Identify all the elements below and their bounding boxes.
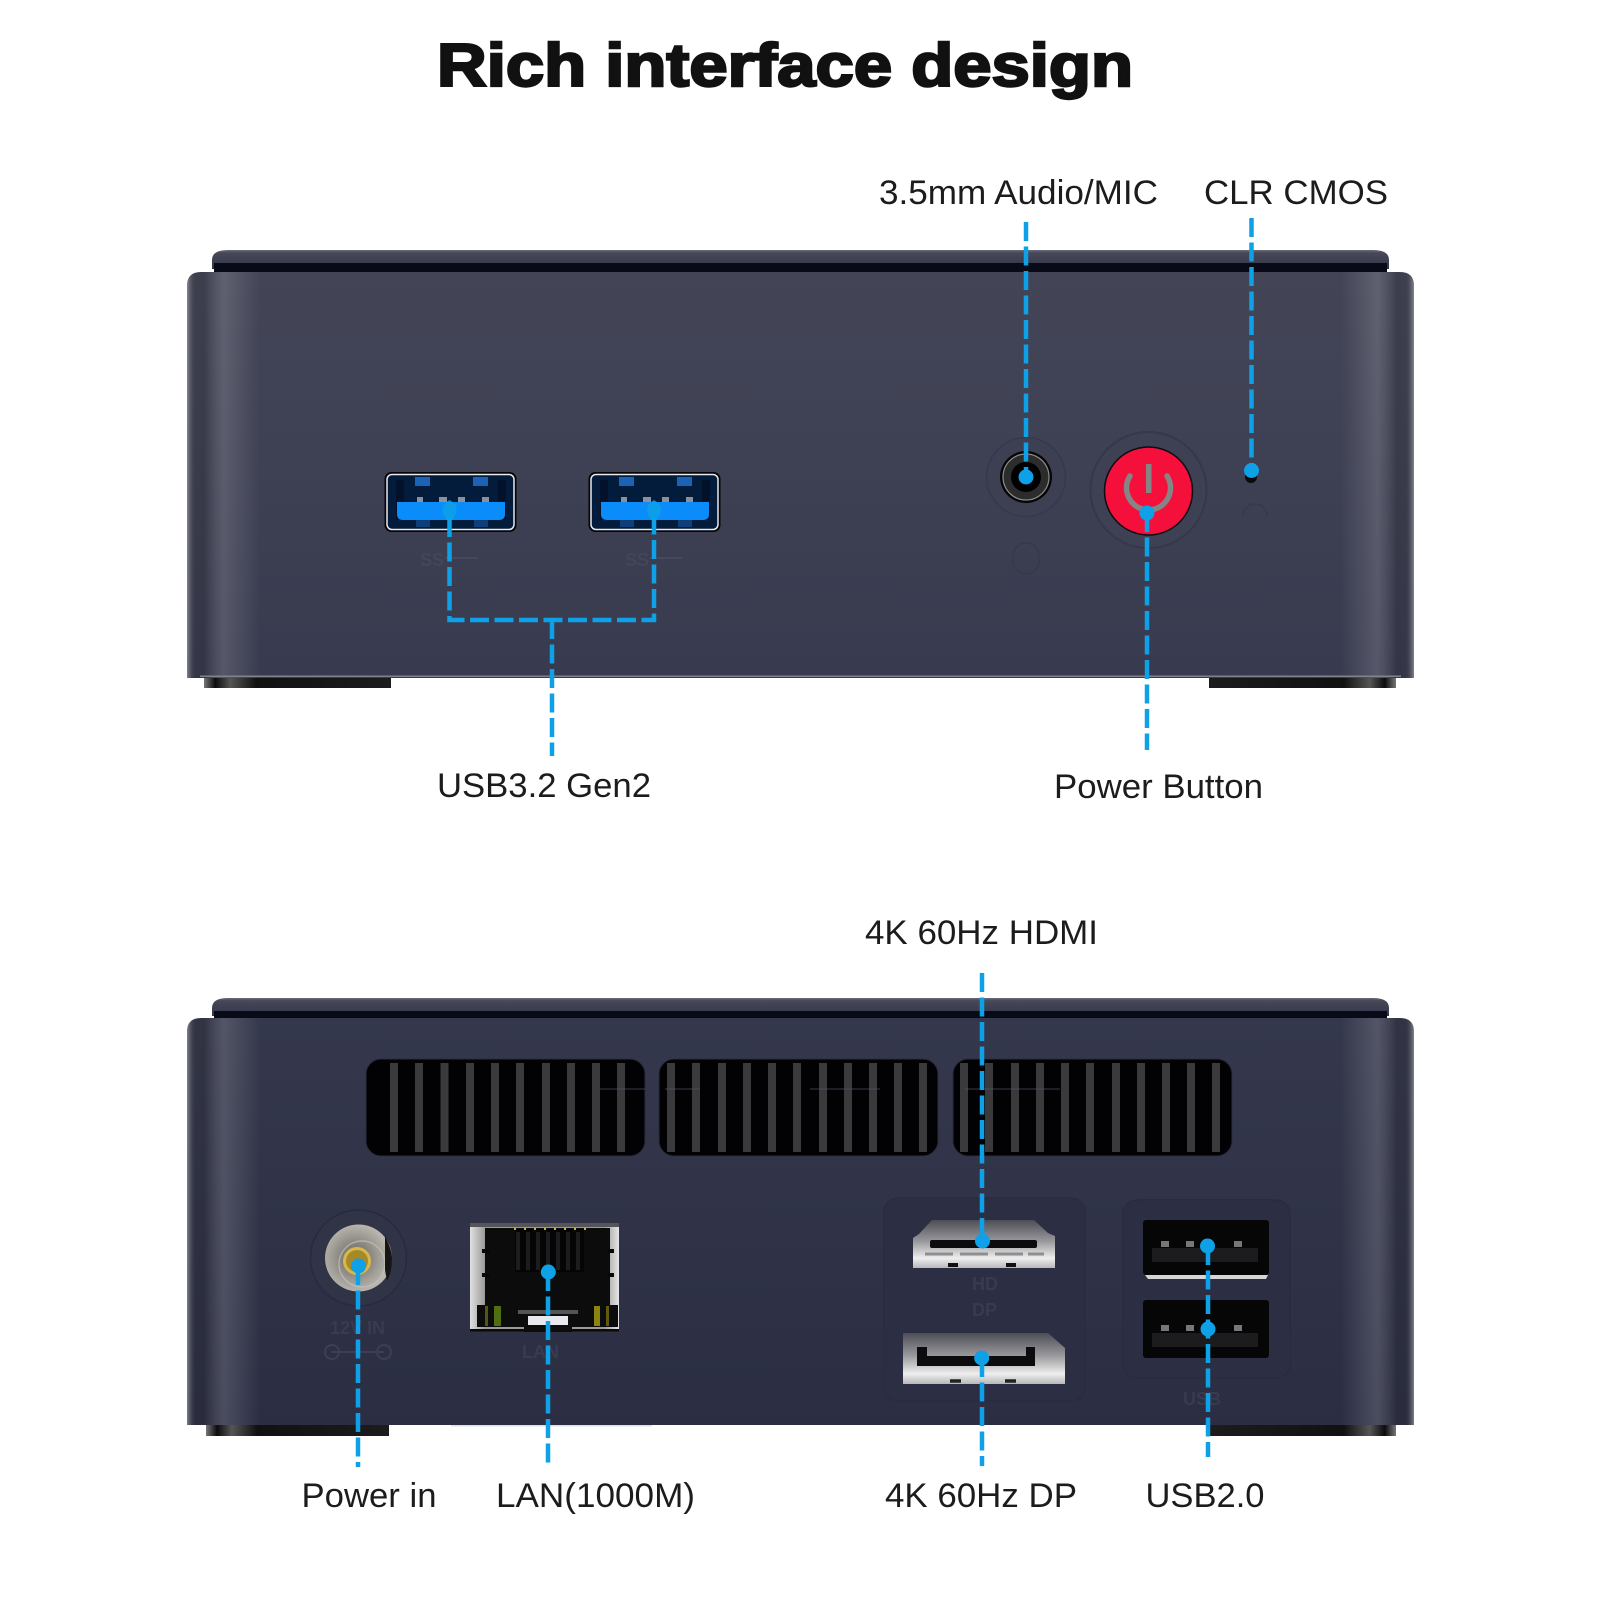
video panel HDMI and DP: DP (972, 1300, 997, 1320)
callout line: HDMI (975, 973, 990, 1248)
title: Rich interface design (437, 32, 1133, 99)
label: 4K 60Hz DP: 4K 60Hz DP (885, 1477, 1077, 1515)
USB logos (420, 550, 682, 570)
callout line: Power in (351, 1258, 366, 1467)
callout line: USB2.0 (1200, 1238, 1216, 1457)
audio jack (986, 438, 1066, 574)
label: Power Button: Power Button (1054, 768, 1263, 806)
vents (366, 1059, 1232, 1156)
USB3 port left (384, 472, 516, 532)
label: USB3.2 Gen2: USB3.2 Gen2 (437, 767, 651, 805)
USB2 port bottom (1143, 1300, 1269, 1358)
label: 4K 60Hz HDMI: 4K 60Hz HDMI (865, 914, 1098, 952)
power button (1090, 432, 1206, 548)
device body (187, 272, 1414, 678)
LAN port: LAN (522, 1342, 559, 1362)
callout line: LAN (541, 1264, 556, 1464)
video panel HDMI and DP (884, 1198, 1085, 1401)
callout line: 3.5mm Audio/MIC (1018, 222, 1034, 484)
panel: rear of mini PC (187, 998, 1414, 1436)
callout lines and dots: USB3.2 Gen2 (442, 500, 661, 756)
feet (204, 677, 1396, 688)
USB2 panel: USB (1183, 1389, 1221, 1409)
label: CLR CMOS: CLR CMOS (1204, 174, 1388, 212)
callout line: DP (974, 1350, 989, 1466)
panel: front of mini PC (187, 250, 1414, 688)
USB logos: SS (420, 550, 444, 570)
label: 3.5mm Audio/MIC: 3.5mm Audio/MIC (879, 174, 1158, 212)
USB logos: SS (625, 550, 649, 570)
USB2 panel (1123, 1200, 1290, 1409)
USB3 port right (588, 472, 720, 532)
top cover rear (212, 998, 1389, 1021)
label: LAN(1000M): LAN(1000M) (496, 1477, 695, 1515)
callout line: CLR CMOS (1244, 218, 1259, 478)
LAN port (470, 1223, 619, 1362)
HDMI port (913, 1220, 1055, 1268)
feet rear (206, 1424, 1396, 1436)
callout line: Power Button (1140, 506, 1154, 750)
device body rear (187, 1018, 1414, 1426)
label: USB2.0: USB2.0 (1146, 1477, 1264, 1515)
video panel HDMI and DP: HD (972, 1274, 998, 1294)
DP port (903, 1333, 1065, 1384)
DC power jack (310, 1210, 406, 1359)
label: Power in: Power in (302, 1477, 436, 1515)
USB2 port top (1143, 1220, 1269, 1279)
DC power jack: 12V IN (330, 1318, 385, 1338)
top cover (212, 250, 1389, 273)
CLR CMOS pinhole (1243, 471, 1267, 516)
